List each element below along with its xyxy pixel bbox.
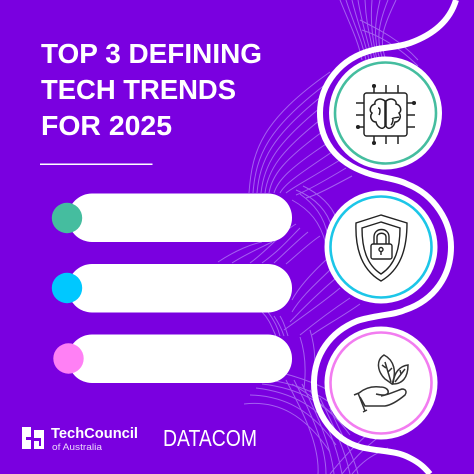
logo: Tech Council of Australia: TechCouncil — [51, 426, 138, 442]
pill 3 — [53, 334, 292, 383]
title: FOR 2025 — [41, 110, 172, 141]
logo: Tech Council of Australia: of Australia — [52, 442, 103, 453]
logo: Tech Council of Australia — [22, 426, 138, 453]
title: TECH TRENDS — [41, 74, 236, 105]
winding white line — [314, 0, 456, 474]
background wave lines — [218, 0, 418, 474]
icon: chip with brain — [356, 85, 415, 144]
logo mark — [22, 427, 44, 449]
title underline — [40, 164, 152, 165]
circle 2: security — [324, 190, 438, 304]
icon: shield with padlock — [356, 215, 407, 281]
pill 2 — [52, 264, 292, 312]
circle 3: sustainability — [324, 326, 438, 440]
pill 1 — [52, 194, 292, 242]
title: TOP 3 DEFINING — [41, 38, 262, 69]
logo: Datacom: DATACOM — [163, 425, 257, 451]
title — [41, 38, 262, 141]
icon: hand with leaves — [354, 355, 408, 412]
circle 1: AI chip — [329, 56, 442, 170]
